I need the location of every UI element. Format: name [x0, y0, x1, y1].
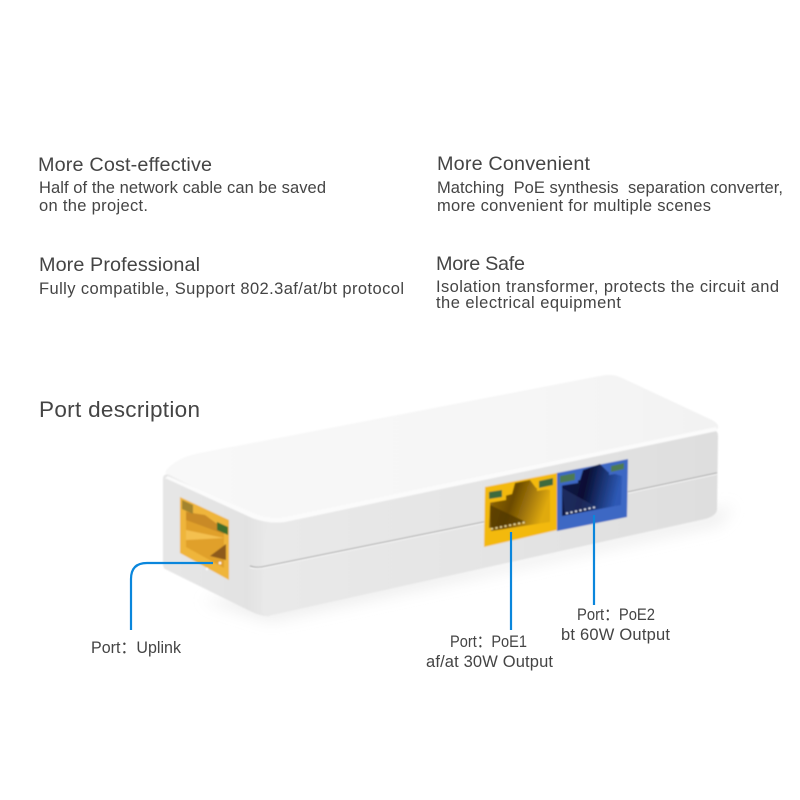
feature: more safe: More Safe	[436, 253, 525, 275]
feature: more safe	[436, 253, 779, 312]
label: PoE2 port: Port：PoE2	[577, 606, 655, 624]
callout line: PoE2	[593, 515, 595, 605]
label: PoE2 port	[561, 606, 670, 644]
label: PoE1 port	[426, 633, 553, 671]
device seam lines	[250, 473, 717, 567]
label: PoE1 port: Port：PoE1	[450, 633, 527, 651]
feature: more cost-effective: More Cost-effective	[38, 154, 212, 176]
label: PoE2 port: bt 60W Output	[561, 626, 670, 644]
callout line: uplink	[131, 563, 213, 630]
feature: more cost-effective: on the project.	[39, 197, 148, 215]
feature: more convenient: Matching PoE synthesis separation converter,	[437, 179, 783, 197]
label: PoE1 port: af/at 30W Output	[426, 653, 553, 671]
feature: more convenient: more convenient for multiple scenes	[437, 197, 711, 215]
device top bevel	[165, 427, 717, 522]
feature: more professional	[39, 254, 404, 298]
feature: more safe: Isolation transformer, protects the circuit and	[436, 278, 779, 296]
feature: more cost-effective: Half of the network cable can be saved	[39, 179, 326, 197]
device shadow	[200, 505, 735, 622]
device: white PoE splitter	[163, 375, 735, 622]
port: uplink yellow	[180, 497, 229, 580]
feature: more convenient: More Convenient	[437, 153, 590, 175]
port: PoE2 blue	[557, 459, 628, 531]
feature: more cost-effective	[38, 154, 326, 215]
heading: port description: Port description	[39, 397, 200, 422]
feature: more convenient	[437, 153, 783, 215]
device top face	[165, 375, 718, 522]
device front face	[262, 430, 718, 615]
port: PoE1 yellow	[484, 473, 557, 547]
feature: more safe: the electrical equipment	[436, 294, 621, 312]
feature: more professional: Fully compatible, Support 802.3af/at/bt protocol	[39, 280, 404, 298]
device left face	[163, 474, 284, 616]
callout line: PoE1	[510, 532, 512, 630]
label: uplink port: Port：Uplink	[91, 639, 182, 657]
feature: more professional: More Professional	[39, 254, 200, 276]
